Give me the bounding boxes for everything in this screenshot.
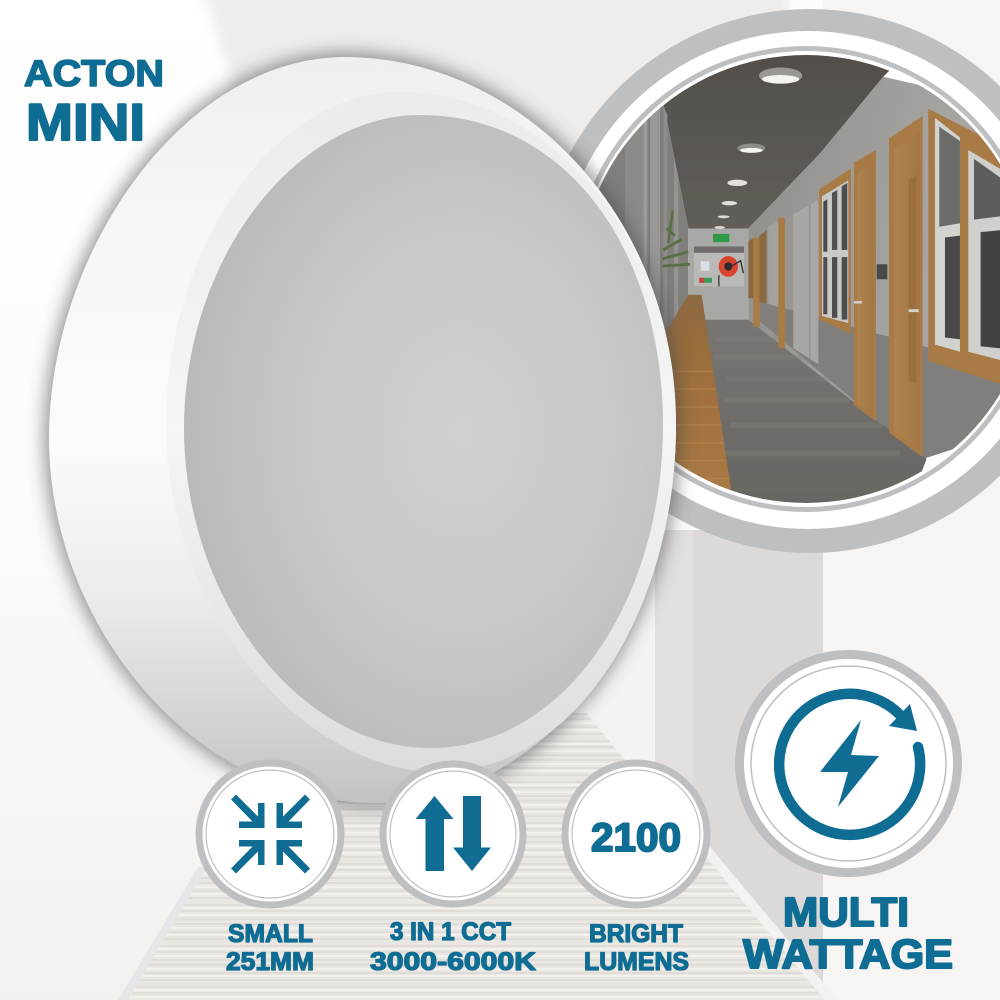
icon: up and down arrows bbox=[416, 796, 491, 871]
door one bbox=[854, 150, 876, 421]
door two bbox=[889, 116, 923, 457]
ceiling lights bbox=[759, 67, 802, 84]
corridor ceiling bbox=[664, 55, 890, 228]
label: multi wattage: WATTAGE bbox=[743, 931, 953, 977]
label: multi wattage bbox=[743, 889, 953, 977]
far doors and windows bbox=[748, 238, 754, 298]
floor bbox=[705, 320, 927, 503]
badge: 3 in 1 CCT bbox=[380, 760, 526, 908]
title: MINI bbox=[26, 94, 145, 152]
inset: corridor photo in ring bbox=[538, 9, 1000, 571]
end wall bbox=[688, 229, 748, 320]
label: bright lumens: LUMENS bbox=[584, 948, 689, 976]
lamp body bbox=[49, 57, 676, 803]
badge: 2100: 2100 bbox=[591, 816, 681, 860]
icon: circular arrow with lightning bolt bbox=[779, 694, 920, 835]
wood strip bbox=[666, 295, 733, 500]
title: ACTON bbox=[24, 53, 164, 94]
floor: striped carpet bbox=[128, 713, 825, 1000]
window with timber frame bbox=[819, 169, 851, 334]
label: multi wattage: MULTI bbox=[783, 889, 909, 935]
right wall bbox=[748, 76, 978, 424]
lamp shadow bbox=[49, 57, 676, 803]
left wall bbox=[570, 86, 688, 536]
lamp front ring bbox=[166, 92, 676, 772]
product: round bulkhead light bbox=[49, 57, 676, 803]
label: small 251mm bbox=[226, 920, 314, 976]
label: small 251mm: SMALL bbox=[228, 920, 313, 948]
icon: four arrows pointing inward bbox=[231, 794, 310, 874]
label: bright lumens: BRIGHT bbox=[589, 920, 683, 948]
lamp lens bbox=[184, 115, 663, 748]
title bbox=[24, 53, 164, 152]
label: 3 in 1 CCT 3000-6000K: 3 IN 1 CCT bbox=[390, 918, 511, 946]
plant bbox=[663, 211, 690, 266]
badge: multi wattage bbox=[735, 650, 962, 877]
large window bbox=[928, 109, 1000, 389]
label: bright lumens bbox=[584, 920, 689, 976]
label: 3 in 1 CCT 3000-6000K: 3000-6000K bbox=[370, 948, 536, 976]
badge: small size bbox=[196, 760, 344, 908]
badge: 2100 bbox=[562, 760, 710, 908]
label: 3 in 1 CCT 3000-6000K bbox=[370, 918, 536, 976]
label: small 251mm: 251MM bbox=[226, 948, 314, 976]
